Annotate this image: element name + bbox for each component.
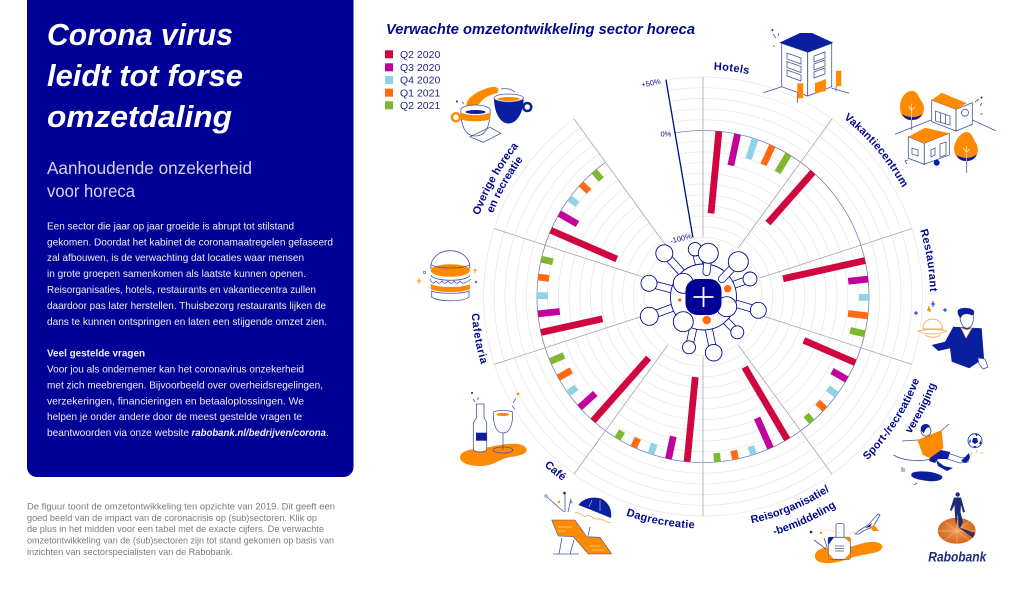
text block: introduction: daardoor pas later herstellen. Thuisbezorg restaurants lijken de: [47, 300, 326, 312]
text block: introduction: in grote groepen samenkomen als laatste kunnen openen.: [47, 268, 306, 280]
icon: hotel: [763, 29, 849, 103]
radial bar chart: [449, 42, 957, 551]
icon: suitcase and airplane: [810, 514, 882, 563]
legend: Q1 2021: [400, 87, 440, 99]
bars: cafe: [537, 312, 649, 426]
legend: Q2 2021: [400, 100, 440, 112]
sector labels: Vakantiecentrum: [846, 112, 907, 188]
axis scale: +50%: [641, 77, 662, 89]
text block: frequently asked questions: [47, 348, 329, 439]
sector labels: Hotels: [714, 62, 749, 74]
sector labels: vereniging: [906, 383, 938, 432]
sector labels: Dagrecreatie: [626, 508, 694, 528]
icon: coronavirus with plus button: [640, 243, 766, 361]
axis scale: 0%: [660, 130, 672, 138]
text block: frequently asked questions: Veel gestelde vragen: [47, 348, 145, 360]
text block: frequently asked questions: verzekeringen, financieringen en betaaloplossingen. We: [47, 395, 304, 407]
legend: Q2 2020: [400, 49, 440, 61]
icon: football player: [894, 424, 983, 485]
text block: introduction: zal afbouwen, is de verwachting dat locaties waar mensen: [47, 252, 304, 264]
title: Corona virus: [47, 17, 233, 52]
subtitle: [47, 158, 252, 201]
text block: introduction: dans te kunnen ontspringen en laten een stijgende omzet zien.: [47, 316, 327, 328]
footnote: de plus in het midden voor een tabel met de exacte cijfers. De verwachte: [27, 524, 324, 535]
bars: overige horeca: [549, 164, 640, 259]
text block: introduction: gekomen. Doordat het kabinet de coronamaatregelen gefaseerd: [47, 236, 333, 248]
sector labels: Overige horeca: [473, 144, 518, 214]
chart heading: Verwachte omzetontwikkeling sector horeca: [386, 22, 695, 38]
text block: frequently asked questions: rabobank.nl/bedrijven/corona: [192, 427, 326, 439]
bars: cafetaria: [519, 247, 602, 338]
icon: wine bottle and glass: [460, 392, 527, 466]
title: leidt tot forse: [47, 58, 243, 93]
subtitle: voor horeca: [47, 181, 135, 201]
text block: frequently asked questions: .: [326, 427, 329, 439]
icon: hamburger: [417, 251, 477, 301]
sector labels: Cafetaria: [472, 314, 487, 364]
icon: waiter with cloche: [914, 301, 988, 369]
logo: Rabobank: [928, 492, 988, 565]
subtitle: Aanhoudende onzekerheid: [47, 158, 252, 178]
bars: dagrecreatie: [618, 377, 695, 462]
title: [47, 17, 243, 134]
bars: sport: [781, 340, 857, 429]
footnote: inzichten van sectorspecialisten van de Rabobank.: [27, 547, 233, 558]
bars: vakantiecentrum: [768, 168, 813, 227]
panel: introduction: [27, 0, 354, 477]
sector labels: Sport-/recreatieve: [863, 379, 919, 460]
text block: introduction: [47, 220, 333, 328]
sector labels: -bemiddeling: [774, 502, 836, 534]
axis scale: [641, 77, 693, 245]
bars: restaurant: [783, 253, 887, 353]
sector labels: [436, 34, 988, 541]
footnote: omzetontwikkeling van de (sub)sectoren zijn tot stand gekomen op basis van: [27, 536, 334, 546]
text block: frequently asked questions: beantwoorden via onze website: [47, 427, 189, 439]
text block: frequently asked questions: helpen je onder andere door de meest gestelde vragen te: [47, 411, 302, 423]
footnote: [27, 502, 335, 558]
text block: frequently asked questions: Voor jou als ondernemer kan het coronavirus onzekerheid: [47, 364, 304, 376]
sector labels: Restaurant: [920, 228, 938, 292]
icon: coffee cups: [452, 87, 531, 142]
sector labels: en recreatie: [488, 157, 522, 212]
bars: hotels: [711, 131, 788, 213]
icon: lounge chair and parasol: [545, 492, 612, 554]
text block: introduction: Een sector die jaar op jaar groeide is abrupt tot stilstand: [47, 220, 294, 232]
text block: introduction: Reisorganisaties, hotels, restaurants en vakantiecentra zullen: [47, 284, 316, 296]
legend: [385, 49, 440, 112]
footnote: goed beeld van de impact van de coronacrisis op (sub)sectoren. Klik op: [27, 513, 317, 524]
title: omzetdaling: [47, 99, 232, 134]
sector labels: Café: [546, 462, 566, 480]
text block: frequently asked questions: met zich meebrengen. Bijvoorbeeld over overheidsregelingen,: [47, 380, 323, 392]
axis scale: -100%: [669, 231, 693, 245]
bars: reisorganisatie: [682, 367, 794, 480]
sector labels: Reisorganisatie/: [750, 484, 828, 524]
logo: Rabobank: Rabobank: [928, 550, 988, 565]
legend: Q3 2020: [400, 62, 440, 74]
footnote: De figuur toont de omzetontwikkeling ten opzichte van 2019. Dit geeft een: [27, 502, 335, 512]
icon: holiday park: [895, 91, 996, 173]
legend: Q4 2020: [400, 75, 440, 87]
